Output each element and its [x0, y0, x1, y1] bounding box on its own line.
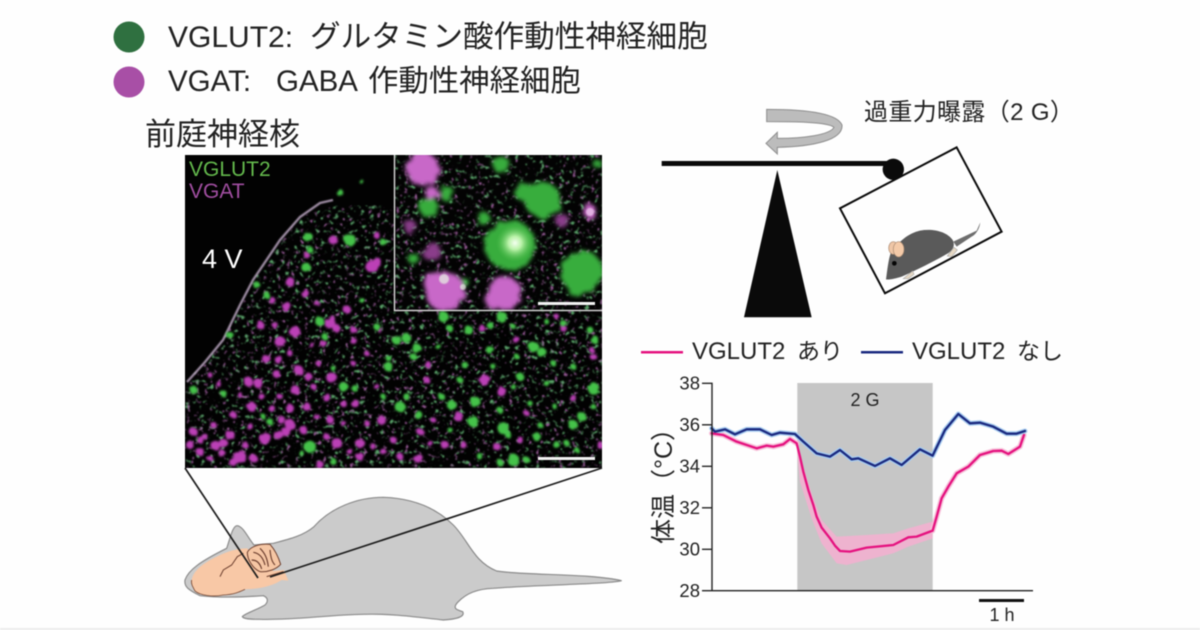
illustration: rat with brain — [185, 497, 622, 620]
brain lower outline — [191, 580, 245, 596]
centrifuge stand — [744, 170, 812, 317]
y axis tick labels — [679, 372, 700, 601]
2 G shaded period — [797, 383, 933, 590]
tissue speckle texture — [184, 204, 602, 468]
y axis tick labels: 30 — [679, 538, 700, 560]
mouse — [886, 222, 980, 279]
zoom lines from brain to image — [185, 468, 602, 578]
y axis tick labels: 34 — [679, 456, 700, 476]
fourth ventricle edge line — [187, 200, 333, 382]
legend: without VGLUT2: VGLUT2 — [912, 338, 1005, 365]
illustration: centrifuge — [662, 109, 1002, 317]
scale bar: main image — [538, 457, 595, 460]
heading: vestibular nucleus: 前庭神経核 — [145, 117, 300, 152]
tilted cage — [840, 147, 1002, 293]
legend: VGLUT2 glutamatergic neurons — [114, 20, 708, 54]
brain fissure — [220, 553, 283, 577]
pivot ball — [883, 159, 904, 180]
legend: without VGLUT2: なし — [1017, 338, 1063, 364]
time scale bar — [979, 599, 1024, 625]
panel: microscopy image of vestibular nucleus — [185, 152, 603, 469]
image label: VGLUT2: VGLUT2 — [189, 158, 271, 181]
label: fourth ventricle: 4 V — [202, 244, 243, 274]
chart: body temperature over time — [650, 372, 1033, 625]
brain — [191, 548, 288, 596]
green VGLUT2 cells — [189, 180, 599, 466]
error band: without VGLUT2 — [712, 414, 1025, 466]
y axis title: 体温（°C） — [650, 416, 678, 544]
error band fill: with VGLUT2 — [797, 441, 933, 565]
time scale bar: 1 h — [989, 605, 1015, 625]
panel: magnified inset — [394, 152, 603, 312]
rotation arrow — [766, 109, 842, 154]
line: without VGLUT2 — [712, 414, 1025, 466]
label: 2 G: 2 G — [850, 390, 880, 410]
magenta VGAT cells — [186, 232, 603, 469]
legend: with VGLUT2 — [641, 338, 843, 365]
rat body silhouette — [185, 497, 622, 620]
legend: VGLUT2 glutamatergic neurons: グルタミン酸作動性神経細胞 — [310, 20, 708, 54]
y axis tick labels: 38 — [679, 372, 700, 394]
y axis tick labels: 28 — [679, 580, 700, 601]
inset border — [394, 155, 602, 310]
scale bar: inset — [538, 302, 595, 305]
image label: VGAT: VGAT — [189, 180, 245, 203]
legend: VGAT GABAergic neurons: GABA — [276, 65, 358, 98]
legend: without VGLUT2 — [861, 338, 1063, 365]
label: hypergravity exposure: 過重力曝露（2 G） — [864, 99, 1074, 126]
legend: with VGLUT2: VGLUT2 — [692, 338, 785, 365]
y axis tick labels: 32 — [679, 497, 700, 518]
y axis tick labels: 36 — [679, 414, 700, 435]
line: with VGLUT2 — [712, 433, 1024, 552]
legend: VGAT GABAergic neurons — [114, 64, 581, 98]
error band: with VGLUT2 — [712, 433, 1024, 531]
axes — [702, 383, 1033, 591]
centrifuge arm — [662, 161, 893, 166]
legend: VGAT GABAergic neurons: VGAT: — [168, 65, 251, 98]
cerebellum folds — [252, 548, 275, 569]
legend: with VGLUT2: あり — [797, 338, 843, 364]
cerebellum — [247, 544, 281, 572]
bottom edge strip — [0, 628, 1200, 630]
legend: VGAT GABAergic neurons: 作動性神経細胞 — [368, 64, 581, 98]
legend: VGLUT2 glutamatergic neurons: VGLUT2: — [168, 21, 293, 54]
